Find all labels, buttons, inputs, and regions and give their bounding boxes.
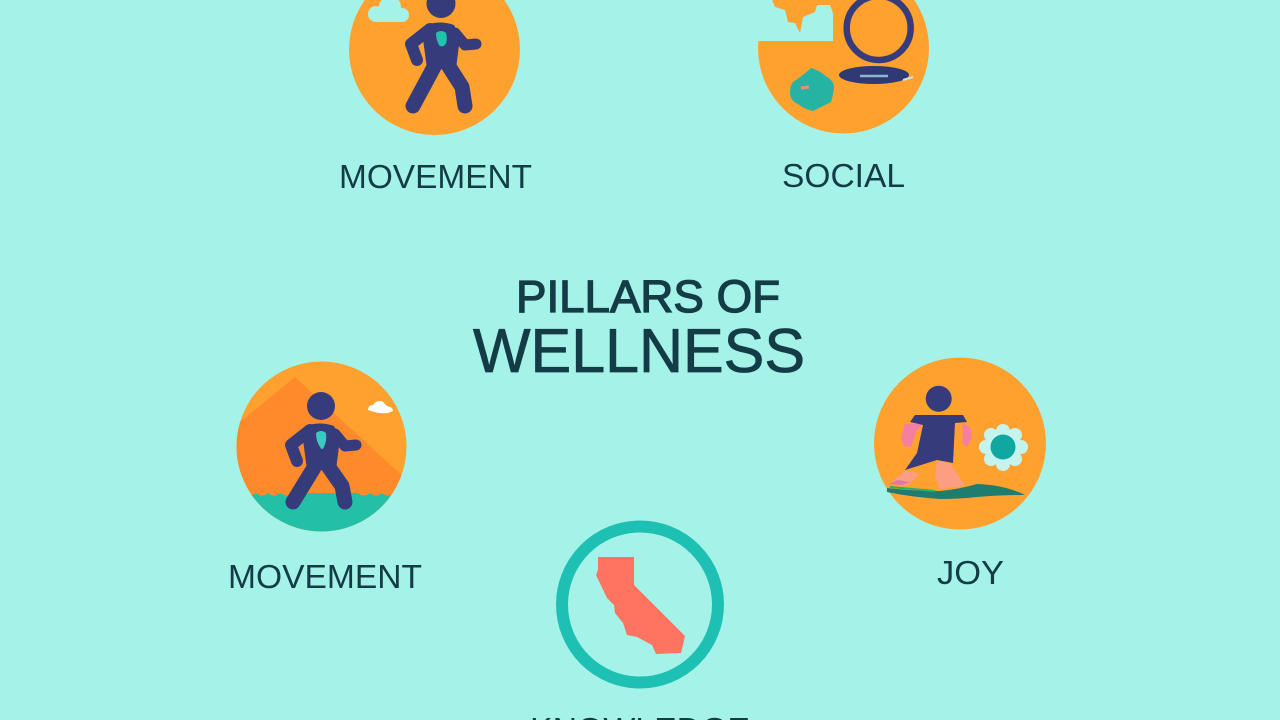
icon: movement walker on mountain	[236, 362, 406, 532]
title: PILLARS OF	[516, 271, 780, 322]
label: social: SOCIAL	[782, 157, 905, 194]
icon: movement walker top	[349, 0, 520, 135]
icon: social mirror and gem	[750, 0, 929, 134]
label: movement left: MOVEMENT	[228, 558, 422, 595]
title	[473, 271, 805, 386]
label: movement top: MOVEMENT	[339, 158, 532, 195]
icon: joy figure with flower	[874, 358, 1046, 530]
label: joy: JOY	[937, 554, 1004, 591]
icon: ring with California map	[562, 526, 718, 682]
icon: flower	[979, 424, 1028, 471]
title: WELLNESS	[473, 317, 805, 386]
